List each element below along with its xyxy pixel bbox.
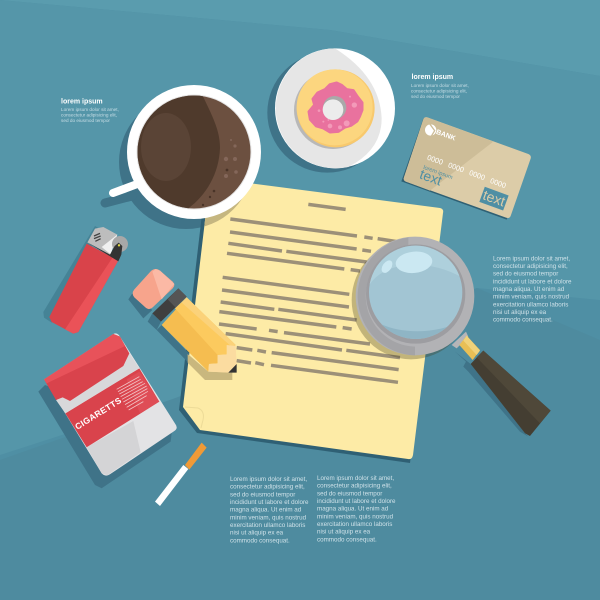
credit card — [401, 117, 531, 220]
pencil — [128, 269, 237, 380]
lighter — [43, 226, 128, 334]
heading left: sed do eiusmod tempor — [61, 118, 110, 123]
paragraph right: Lorem ipsum dolor sit amet, — [493, 256, 570, 262]
paragraph bottom left: magna aliqua. Ut enim ad — [230, 507, 302, 514]
heading left: Lorem ipsum dolor sit amet, — [61, 107, 119, 112]
plate — [267, 48, 395, 173]
heading right: consectetur adipisicing elit, — [411, 89, 467, 94]
donut — [294, 69, 375, 149]
paragraph right — [493, 256, 572, 324]
paragraph bottom right: nisi ut aliquip ex ea — [317, 529, 371, 536]
paragraph bottom left: minim veniam, quis nostrud — [230, 514, 307, 521]
card labels: text — [418, 166, 444, 189]
card number: 0000 — [468, 168, 486, 182]
card logo: BANK — [435, 129, 456, 142]
magnifying glass — [352, 237, 551, 437]
paragraph bottom left: exercitation ullamco laboris — [230, 522, 305, 529]
paragraph bottom right — [317, 475, 396, 543]
heading left: lorem ipsum — [61, 98, 103, 106]
paragraph right: exercitation ullamco laboris — [493, 301, 568, 308]
paragraph bottom right: magna aliqua. Ut enim ad — [317, 506, 389, 513]
cup shadow on table — [105, 95, 253, 229]
pack brand: CIGARETTS — [73, 395, 123, 432]
heading right: sed do eiusmod tempor — [411, 94, 460, 99]
paragraph bottom left: nisi ut aliquip ex ea — [230, 530, 284, 537]
paragraph bottom left: incididunt ut labore et dolore — [230, 499, 309, 506]
paragraph bottom right: commodo consequat. — [317, 536, 377, 543]
cigarette — [155, 443, 207, 506]
heading right: Lorem ipsum dolor sit amet, — [411, 83, 469, 88]
paragraph bottom right: Lorem ipsum dolor sit amet, — [317, 475, 394, 482]
paragraph right: consectetur adipisicing elit, — [493, 263, 568, 270]
heading right: lorem ipsum — [412, 74, 453, 81]
paragraph bottom left: consectetur adipisicing elit, — [230, 484, 305, 491]
paragraph right: incididunt ut labore et dolore — [493, 278, 572, 285]
card number: 0000 — [447, 160, 465, 174]
cigarette pack — [38, 333, 177, 488]
heading right — [411, 74, 469, 99]
card labels: lorem ipsum — [422, 165, 454, 181]
document — [179, 184, 444, 463]
paragraph bottom right: consectetur adipisicing elit, — [317, 483, 392, 490]
paragraph bottom right: sed do eiusmod tempor — [317, 490, 382, 497]
paragraph right: nisi ut aliquip ex ea — [493, 309, 547, 316]
card number: 0000 — [426, 153, 444, 167]
paragraph right: sed do eiusmod tempor — [493, 271, 558, 278]
paragraph bottom right: minim veniam, quis nostrud — [317, 513, 394, 520]
paragraph bottom left — [230, 476, 309, 544]
paragraph bottom left: Lorem ipsum dolor sit amet, — [230, 476, 307, 483]
document text lines — [219, 204, 400, 382]
heading left — [61, 98, 119, 123]
paragraph right: magna aliqua. Ut enim ad — [493, 286, 565, 293]
pack small print — [117, 377, 148, 410]
card number: 0000 — [489, 176, 507, 190]
heading left: consectetur adipisicing elit, — [61, 112, 117, 117]
paragraph bottom left: sed do eiusmod tempor — [230, 491, 295, 498]
paragraph right: commodo consequat. — [493, 316, 553, 324]
coffee cup — [113, 85, 261, 219]
paragraph bottom right: exercitation ullamco laboris — [317, 521, 392, 528]
card number — [426, 153, 507, 190]
card text box: text — [481, 187, 508, 209]
paragraph bottom right: incididunt ut labore et dolore — [317, 498, 396, 505]
paragraph right: minim veniam, quis nostrud — [493, 294, 570, 301]
paragraph bottom left: commodo consequat. — [230, 537, 290, 544]
